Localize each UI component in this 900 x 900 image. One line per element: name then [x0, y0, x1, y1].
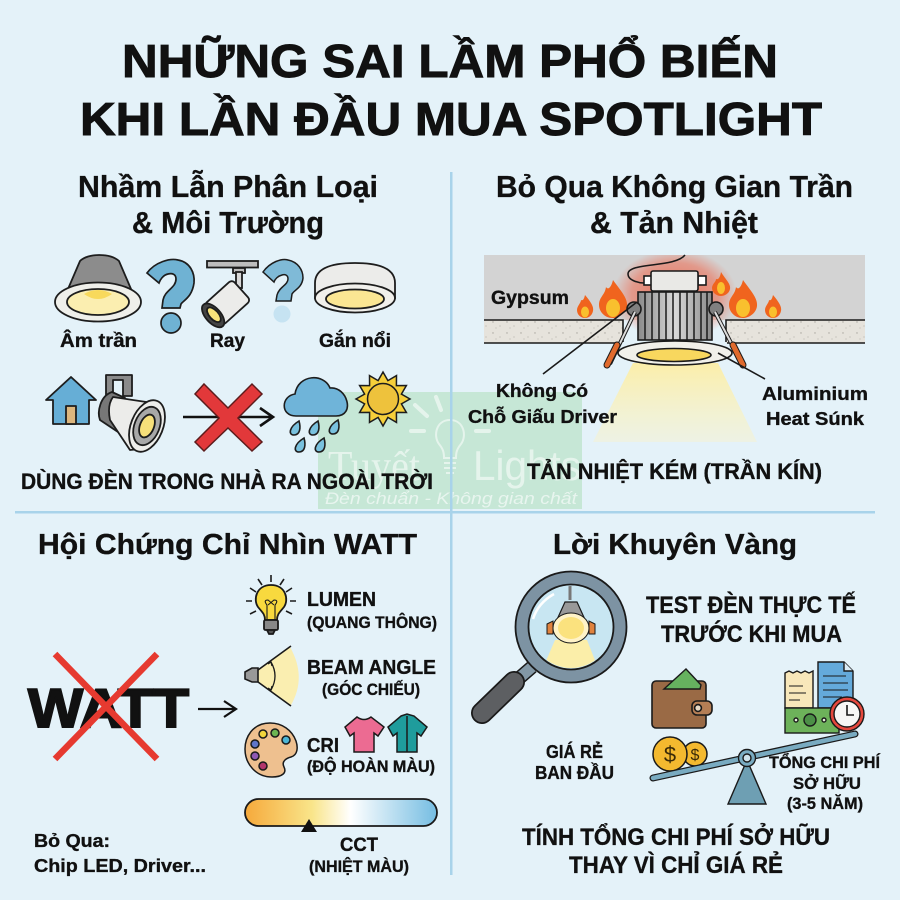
- label: cri: (ĐỘ HOÀN MÀU): [307, 757, 435, 776]
- label: total cost of ownership: [769, 753, 881, 813]
- icon: banknote: [785, 708, 839, 733]
- label: total cost of ownership: SỞ HỮU: [793, 773, 861, 793]
- label: aluminium heat sink: Heat Súnk: [766, 408, 865, 429]
- caption: calculate total cost: [522, 822, 830, 879]
- icon: paint palette: [245, 723, 297, 777]
- icon: document: [818, 662, 853, 708]
- icon: downlight with heat sink: [607, 255, 743, 365]
- icon: teal shirt: [388, 714, 427, 752]
- icon: magnifying glass: [482, 572, 626, 713]
- diagram: ceiling cross section: [484, 249, 865, 343]
- watermark: Đèn chuẩn - Không gian chất: [325, 489, 578, 508]
- title: KHI LẦN ĐẦU MUA SPOTLIGHT: [80, 93, 822, 145]
- icon: wallet with cash: [652, 669, 712, 728]
- arrow: [198, 701, 236, 717]
- icon: indoor spotlight: [99, 375, 172, 457]
- watermark: [318, 392, 582, 509]
- crossed out watt: WATT: [28, 677, 189, 739]
- labels: light types: Âm trần: [60, 330, 137, 352]
- caption: calculate total cost: TÍNH TỔNG CHI PHÍ SỞ HỮU: [522, 822, 830, 851]
- label: gypsum: Gypsum: [491, 288, 569, 309]
- panel: watt syndrome: [28, 529, 437, 876]
- heading: classification: Nhầm Lẫn Phân Loại: [78, 169, 378, 204]
- icon: beam angle: [245, 646, 299, 706]
- chart: colour temperature bar: [245, 799, 437, 832]
- label: lumen: LUMEN: [307, 589, 376, 611]
- label: no driver space: Không Có: [496, 380, 588, 401]
- heading: watt: Hội Chứng Chỉ Nhìn WATT: [38, 529, 417, 561]
- caption: calculate total cost: THAY VÌ CHỈ GIÁ RẺ: [569, 850, 783, 879]
- title: NHỮNG SAI LẦM PHỔ BIẾN: [122, 35, 778, 87]
- title: [80, 35, 822, 145]
- icon: clock: [830, 697, 864, 731]
- label: beam angle: (GÓC CHIẾU): [322, 680, 420, 699]
- note: ignored items: Bỏ Qua:: [34, 830, 110, 851]
- crossed out watt: [28, 654, 189, 759]
- label: no driver space: [468, 380, 617, 427]
- label: lumen: (QUANG THÔNG): [307, 613, 437, 632]
- icon: coins: [653, 737, 707, 771]
- note: ignored items: Chip LED, Driver...: [34, 855, 206, 876]
- icon: coins: $: [691, 747, 700, 764]
- panel: ceiling space and heat: [468, 169, 868, 484]
- icon: recessed downlight: [55, 255, 141, 322]
- label: total cost of ownership: (3-5 NĂM): [787, 794, 863, 813]
- heading: ceiling space: [496, 169, 853, 240]
- label: total cost of ownership: TỔNG CHI PHÍ: [769, 753, 881, 772]
- heading: ceiling space: Bỏ Qua Không Gian Trần: [496, 169, 853, 204]
- icon: question mark: [147, 260, 194, 333]
- heading: classification: [78, 169, 378, 240]
- caption: poor heat dissipation: TẢN NHIỆT KÉM (TRẦN KÍN): [527, 459, 822, 484]
- icon: question mark fading: [263, 260, 303, 322]
- label: cct: (NHIỆT MÀU): [309, 857, 409, 876]
- label: beam angle: BEAM ANGLE: [307, 657, 436, 679]
- label: cct: CCT: [340, 835, 378, 856]
- watermark: Tuyết: [328, 444, 420, 490]
- text: test before buying: [646, 591, 856, 648]
- icon: light bulb: [246, 575, 296, 634]
- icon: track light: [198, 261, 258, 331]
- label: cheap initial price: [535, 741, 614, 783]
- label: cct: [309, 835, 409, 876]
- icon: sun: [356, 372, 410, 426]
- caption: indoor light outdoors: DÙNG ĐÈN TRONG NHÀ RA NGOÀI TRỜI: [21, 469, 433, 494]
- icon: pink shirt: [345, 717, 384, 752]
- label: lumen: [307, 589, 437, 632]
- label: aluminium heat sink: [762, 383, 868, 429]
- icon: seesaw balance: [653, 734, 855, 804]
- icon: house: [46, 377, 96, 424]
- labels: light types: [60, 330, 391, 352]
- icon: receipt: [785, 671, 813, 708]
- text: test before buying: TEST ĐÈN THỰC TẾ: [646, 591, 856, 619]
- icon: coins: $: [664, 742, 676, 767]
- icon: blocked arrow: [183, 384, 273, 451]
- note: ignored items: [34, 830, 206, 876]
- label: beam angle: [307, 657, 436, 699]
- text: test before buying: TRƯỚC KHI MUA: [661, 620, 842, 648]
- label: cri: [307, 735, 435, 776]
- icon: rain cloud: [284, 378, 347, 452]
- icon: flames: [577, 272, 781, 318]
- labels: light types: Gắn nổi: [319, 330, 391, 352]
- heading: ceiling space: & Tản Nhiệt: [590, 205, 758, 240]
- leader lines: [543, 302, 765, 379]
- panel: golden advice: [482, 529, 881, 879]
- icon: surface mounted light: [315, 263, 395, 312]
- label: cheap initial price: BAN ĐẦU: [535, 762, 614, 783]
- watermark: Lights: [473, 442, 581, 489]
- heading: classification: & Môi Trường: [132, 205, 324, 240]
- heading: advice: Lời Khuyên Vàng: [553, 529, 797, 561]
- label: cheap initial price: GIÁ RẺ: [546, 741, 603, 762]
- panel: classification and environment: [21, 169, 433, 494]
- labels: light types: Ray: [210, 331, 245, 352]
- label: cri: CRI: [307, 735, 339, 757]
- icon: beam of light: [593, 363, 757, 442]
- label: aluminium heat sink: Aluminium: [762, 383, 868, 404]
- label: no driver space: Chỗ Giấu Driver: [468, 406, 617, 427]
